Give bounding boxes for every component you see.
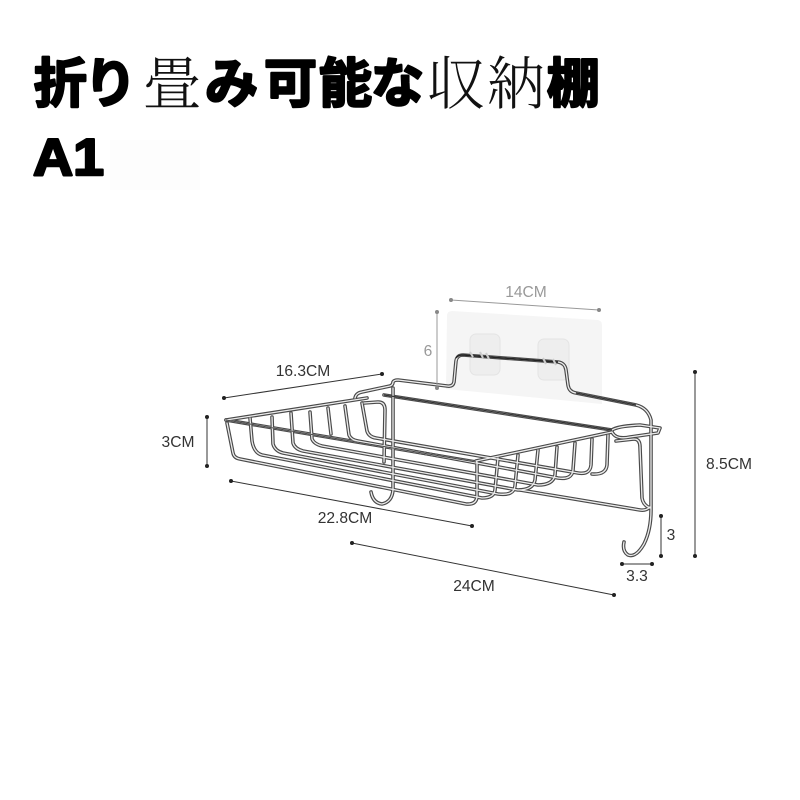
dimension: hook width 3.3: 3.3	[626, 568, 648, 585]
title: 可	[264, 55, 317, 114]
dimension: 16.3CM: 16.3CM	[276, 363, 330, 380]
title: み	[205, 55, 258, 114]
title: 能	[319, 55, 372, 114]
dimension: hook height 3	[659, 514, 675, 558]
title: 収	[427, 52, 485, 117]
dimension: 24CM: 24CM	[453, 578, 495, 595]
dimension: hook height 3: 3	[667, 527, 675, 544]
title: り	[84, 55, 137, 114]
title: 棚	[547, 55, 600, 114]
icon: suction hooks	[470, 334, 569, 380]
wire basket shelf	[226, 352, 660, 556]
dimension: 3CM: 3CM	[162, 434, 194, 451]
dimension: 24CM	[350, 541, 616, 597]
title: 折	[34, 55, 87, 114]
title: 納	[487, 52, 545, 117]
dimension: 6 height	[424, 310, 439, 390]
model label A1: A1	[33, 129, 104, 187]
dimension: 3CM	[162, 415, 209, 468]
dimension: 22.8CM: 22.8CM	[318, 510, 372, 527]
adhesive wall plate	[446, 311, 602, 404]
faint erased patch	[110, 140, 200, 190]
dimension: 14CM width	[449, 284, 601, 312]
dimension: 8.5CM: 8.5CM	[706, 456, 752, 473]
dimension: hook width 3.3	[620, 562, 654, 585]
dimension: 22.8CM	[229, 479, 474, 528]
title: な	[371, 55, 424, 114]
dimension: 16.3CM	[222, 363, 384, 400]
title: 畳	[143, 52, 201, 117]
dimension: 6 height: 6	[424, 343, 432, 360]
dimension: 8.5CM	[693, 370, 752, 558]
title	[34, 52, 600, 117]
dimension: 14CM width: 14CM	[505, 284, 547, 301]
